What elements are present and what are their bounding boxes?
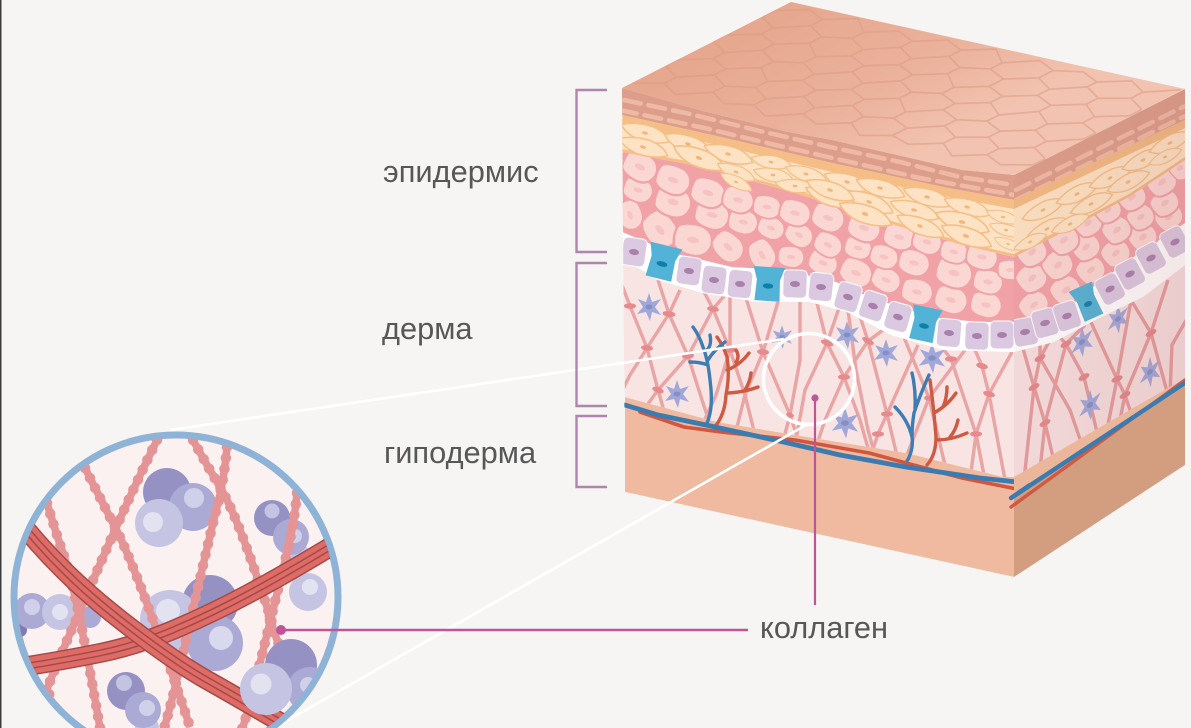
collagen knots <box>624 303 996 437</box>
beaded elastic fibres <box>43 440 300 728</box>
keratinocyte cells right <box>1016 160 1185 317</box>
bracket: hypodermis <box>576 416 607 487</box>
vessel ends at corner <box>1011 485 1030 507</box>
white membrane band <box>622 228 1014 352</box>
right face shading <box>1014 89 1185 477</box>
magnified collagen circle <box>13 435 338 728</box>
cells spheres <box>13 468 327 728</box>
collagen fibres right <box>1022 280 1191 480</box>
white membrane right <box>1014 219 1185 352</box>
top surface of skin <box>622 2 1185 175</box>
blood vessel trees <box>690 327 967 465</box>
granular cells right <box>1014 131 1185 251</box>
stratum corneum band <box>622 88 1014 200</box>
corneum right <box>1014 89 1185 200</box>
label: epidermis: эпидермис <box>383 154 539 189</box>
fibroblast stars front <box>637 293 945 438</box>
pink layer right <box>1014 180 1185 320</box>
blood vessels front <box>625 405 1017 489</box>
label: collagen: коллаген <box>760 610 888 645</box>
blood vessels right <box>1011 380 1185 507</box>
corneum flakes <box>620 100 1014 195</box>
front spheres <box>240 639 318 715</box>
basal purple and blue cells <box>620 236 1014 350</box>
collagen fibres front <box>620 280 1012 480</box>
callout: white circle on dermis with zoom lines <box>170 334 854 723</box>
pink keratinocyte layer <box>622 152 1014 322</box>
hypodermis right <box>1014 378 1185 577</box>
callout dot inside circle <box>276 625 286 635</box>
label: hypodermis: гиподерма <box>384 435 537 470</box>
keratinocyte cells <box>614 147 1022 320</box>
dermis front <box>622 258 1014 477</box>
bracket: epidermis <box>576 90 607 252</box>
3D skin block <box>614 2 1191 577</box>
basal cells right <box>1011 224 1191 348</box>
granular cells <box>617 119 1025 254</box>
dermis right <box>1014 265 1185 477</box>
orange granular layer <box>622 115 1014 257</box>
orange layer right <box>1014 120 1185 257</box>
collagen bundle <box>25 528 335 725</box>
collagen leader line <box>281 394 819 630</box>
bracket: dermis <box>576 263 607 406</box>
fibroblast stars right <box>1071 301 1160 424</box>
label: dermis: дерма <box>382 311 473 346</box>
right face layers <box>1011 89 1191 577</box>
hypodermis front <box>625 397 1014 577</box>
front face layers <box>614 88 1025 577</box>
